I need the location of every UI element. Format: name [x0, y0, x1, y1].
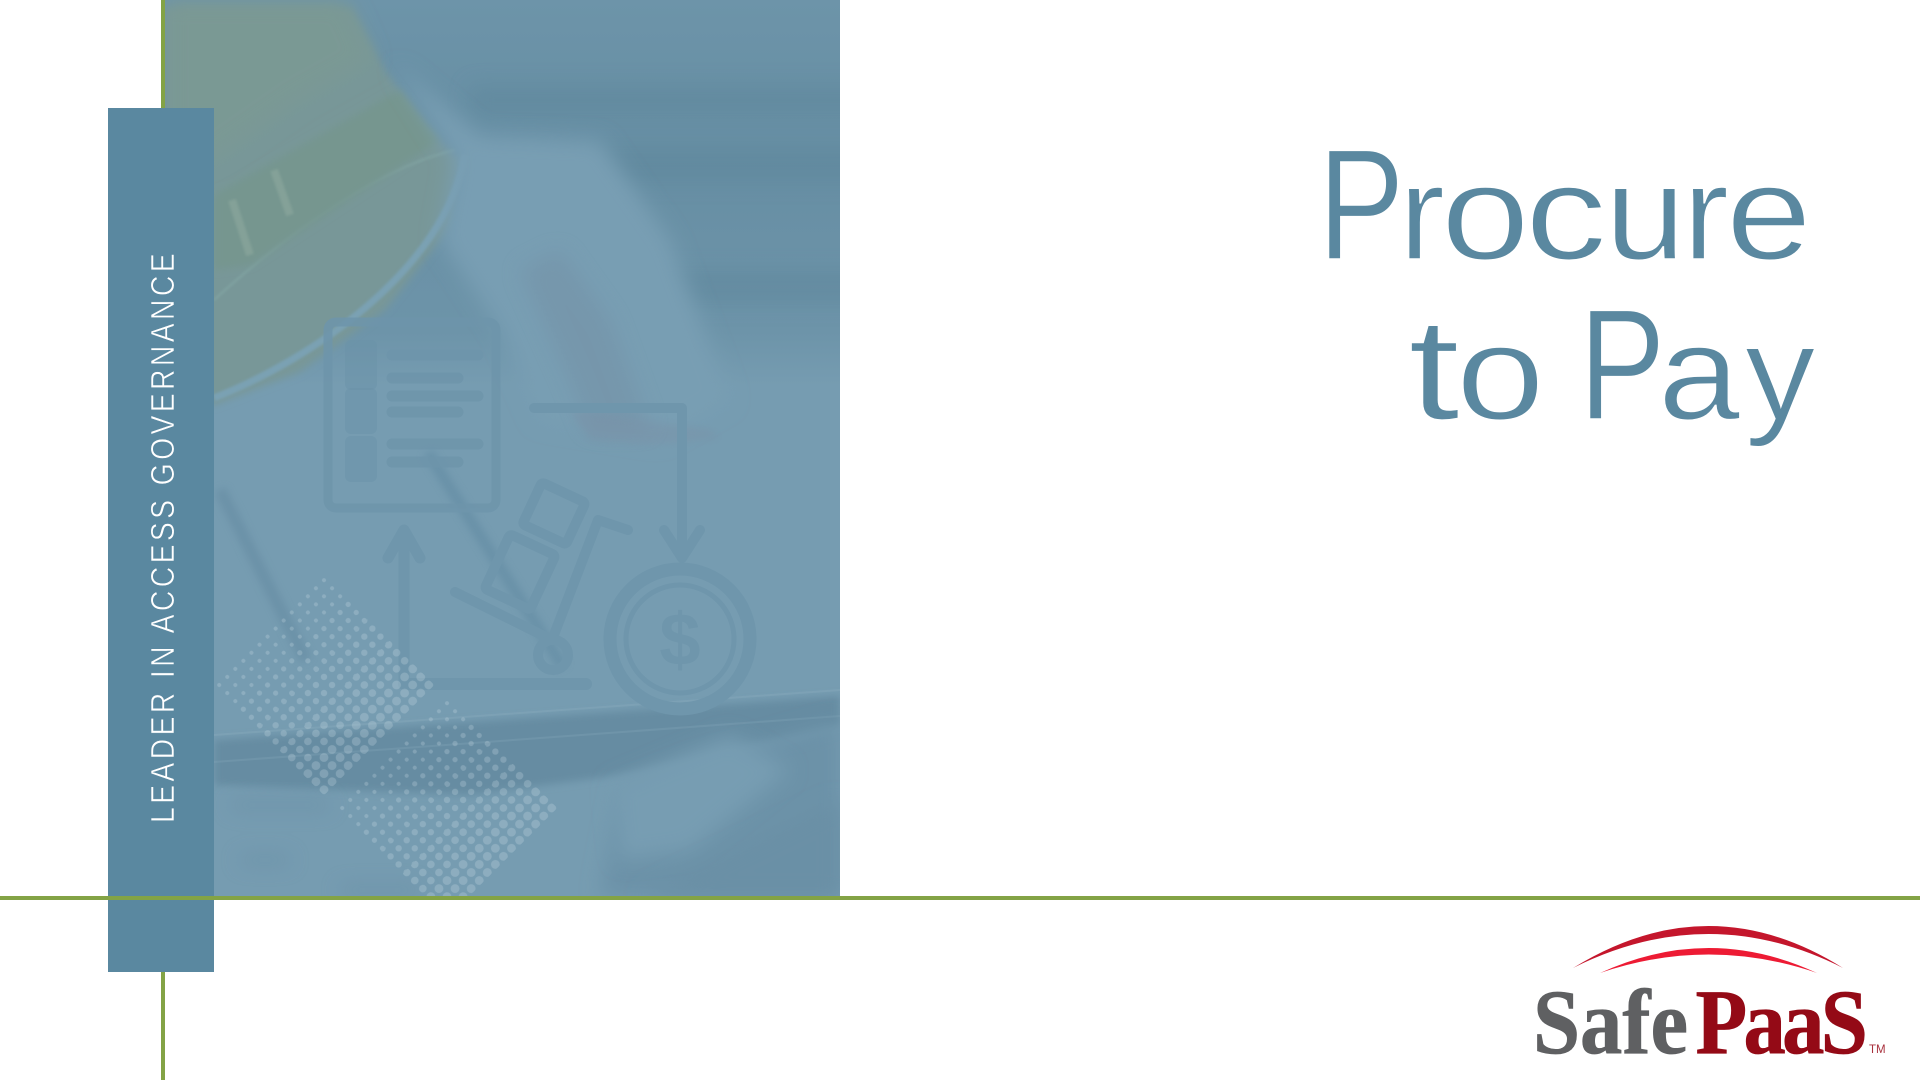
hand light shape — [420, 96, 700, 354]
icon: dollar coin — [640, 697, 730, 716]
title: o — [1456, 299, 1545, 448]
halftone diamond 1 — [214, 575, 434, 795]
title: t — [1408, 288, 1460, 450]
halftone diamond 2 — [340, 701, 556, 896]
logo wordmark: SafePaaS — [1533, 972, 1865, 1074]
title: o — [1441, 139, 1530, 288]
pen strokes — [428, 453, 563, 667]
title: y — [1745, 299, 1815, 448]
title: r — [1398, 139, 1444, 288]
title: r — [1682, 139, 1728, 288]
green vertical line bottom — [161, 972, 165, 1080]
dark horizontal blurred bands — [470, 85, 880, 304]
logo arcs — [1573, 926, 1843, 973]
vertical band label: LEADER IN ACCESS GOVERNANCE — [144, 250, 182, 823]
icon: hand truck with boxes — [455, 482, 628, 670]
title: P — [1318, 117, 1404, 293]
title: c — [1525, 139, 1607, 288]
title: P — [1579, 277, 1666, 453]
icon: clipboard — [324, 318, 375, 390]
watch bezel arc — [214, 190, 454, 401]
title: a — [1658, 299, 1740, 448]
icon: arrow up — [388, 530, 586, 684]
title — [1318, 117, 1815, 453]
green horizontal line — [0, 896, 1920, 900]
green vertical line top — [161, 0, 165, 108]
green tinted watch area — [214, 47, 454, 406]
title: e — [1726, 139, 1812, 288]
icon: arrow down — [533, 403, 687, 444]
vertical band — [108, 108, 214, 972]
panel: blurred photo background — [162, 0, 880, 918]
logo: SafePaaS — [1533, 926, 1886, 1074]
icon: dollar coin: $ — [659, 598, 701, 681]
desk shadow and lower hand — [214, 696, 840, 795]
title: u — [1605, 139, 1685, 288]
logo trademark: TM — [1869, 1044, 1886, 1056]
